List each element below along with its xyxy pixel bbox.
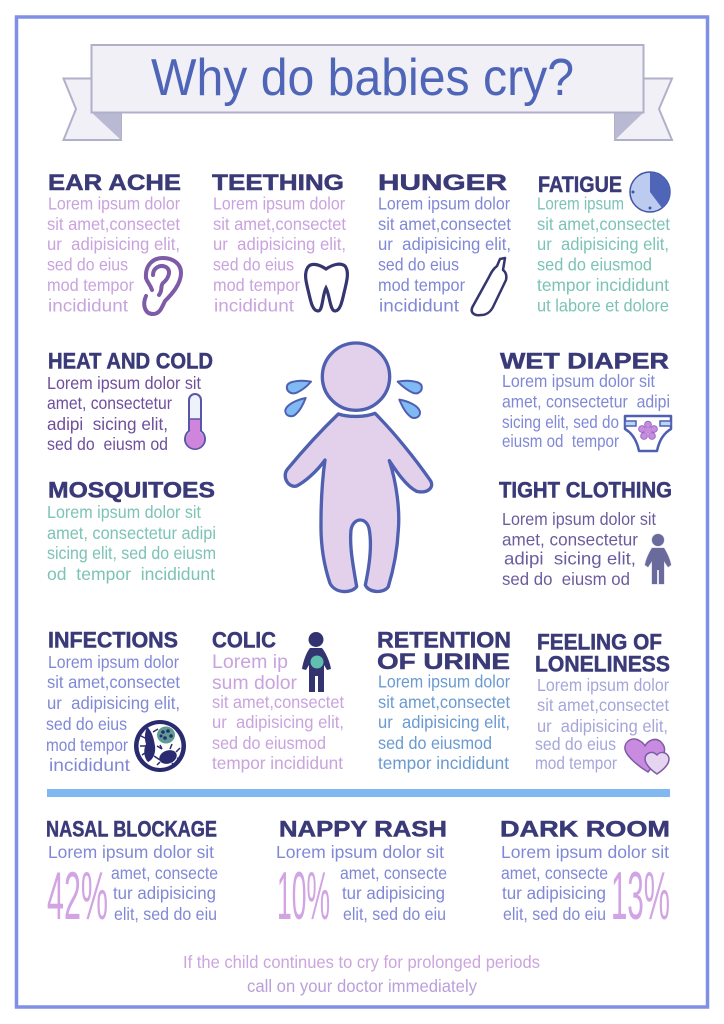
text block: ur adipisicing elit, [537,234,669,254]
text block: Lorem ipsum dolor [213,194,345,214]
tear: lower left [285,398,306,416]
text block: od tempor incididunt [47,564,215,584]
panel: hunger [378,170,511,316]
text block: elit, sed do eiu [343,904,446,924]
baby head [322,343,390,410]
text block: sed do eiusm od [47,434,168,454]
text block: ur adipisicing elit, [213,234,346,254]
text block: sed do eius [47,254,128,274]
banner left fold [91,112,121,140]
heading: RETENTION [377,628,511,652]
banner right tail [615,78,672,140]
text block: ur adipisicing elit, [378,712,510,732]
heading: NASAL BLOCKAGE [46,816,217,842]
footer note: If the child continues to cry for prolonged periods [183,952,540,972]
title banner [64,45,672,140]
text block: ur adipisicing elit, [537,716,668,736]
panel: fatigue [537,172,670,316]
text block: Lorem ipsum dolor sit [47,373,201,393]
icon: baby bottle [472,258,506,315]
text block: mod tempor [535,753,617,773]
text block: ur adipisicing elit, [47,234,180,254]
text block: amet, consectetur [47,393,172,413]
text block: Lorem ipsum dolor sit [502,371,655,391]
title: Why do babies cry? [151,49,574,107]
icon: clock [630,172,670,212]
baby body [285,413,432,592]
text block: adipi sicing elit, [47,414,168,434]
panel: infections [46,628,186,775]
heading: WET DIAPER [500,348,669,374]
text block: amet, consectetur [502,530,638,550]
divider bar [47,789,670,797]
text block: sit amet,consectet [47,214,180,234]
panel: ear ache [47,170,181,316]
text block: Lorem ipsum dolor [378,672,510,692]
text block: Lorem ipsum dolor [378,194,510,214]
text block: sed do eiusm od [502,569,630,589]
panel: nasal blockage: 42% [47,858,108,934]
text block: incididunt [49,755,130,775]
banner right fold [615,112,644,140]
text block: sit amet,consectet [378,692,510,712]
heading: MOSQUITOES [48,478,215,502]
text block: ur adipisicing elit, [378,234,511,254]
text block: Lorem ipsum dolor sit [48,842,214,862]
text block: sit amet,consectet [378,214,511,234]
icon: hearts [625,739,669,774]
text block: sed do eius [213,254,294,274]
text block [47,502,216,584]
text block: sit amet,consectet [537,695,669,715]
icon: ear [144,258,181,314]
panel: nappy rash: 10% [277,858,330,934]
text block: adipi sicing elit, [504,548,636,568]
text block: sed do eiusmod [212,733,326,753]
text block: sit amet,consectet [212,692,344,712]
text block: ur adipisicing elit, [212,712,344,732]
text block: amet, consectetur adipi [502,392,670,412]
text block: sed do eiusmod [537,254,652,274]
text block: tempor incididunt [378,753,509,773]
text block [47,194,180,316]
text block: mod tempor [46,735,128,755]
heading: HEAT AND COLD [48,348,213,374]
text block: tur adipisicing [502,883,606,903]
panel: heat and cold [47,348,213,454]
panel: nappy rash [276,816,447,934]
text block: sed do eiusmod [378,733,492,753]
text block: elit, sed do eiu [503,904,606,924]
panel: tight clothing [499,478,672,589]
text block [47,373,201,454]
icon: diaper [625,416,671,451]
text block: sed do eius [46,714,127,734]
footer note [183,952,540,996]
text block [535,675,669,773]
icon: germs [134,720,186,772]
text block: amet, consecte [340,863,447,883]
text block: Lorem ipsum [537,194,624,214]
text block [46,652,180,775]
banner left tail [64,78,121,140]
heading: OF URINE [377,649,510,674]
text block: sed do eius [535,734,616,754]
panel: dark room [500,816,670,934]
text block: eiusm od tempor [502,431,619,451]
crying baby figure [285,343,432,592]
text block: incididunt [214,296,294,316]
panel: feeling of loneliness [535,630,670,774]
text block [502,371,670,451]
text block: tur adipisicing [342,883,445,903]
text block: amet, consecte [111,863,218,883]
icon: child in tight clothes [645,534,671,584]
text block [502,509,656,589]
text block [537,194,670,316]
panel: retention of urine [377,628,511,773]
text block: sit amet,consectet [47,672,180,692]
heading: DARK ROOM [500,816,670,842]
heading: FEELING OF [537,630,662,654]
text block: Lorem ipsum dolor [48,194,180,214]
panel: teething [212,170,347,316]
text block: amet, consecte [501,863,608,883]
icon: thermometer [185,394,205,449]
text block: elit, sed do eiu [114,904,217,924]
text block: Lorem ipsum dolor [537,675,669,695]
text block [378,672,510,773]
panel: wet diaper [500,348,671,451]
text block: mod tempor [213,275,300,295]
footer note: call on your doctor immediately [247,976,477,996]
text block: mod tempor [47,275,134,295]
heading: EAR ACHE [48,170,181,195]
text block: sed do eius [378,254,459,274]
text block: ut labore et dolore [537,296,669,316]
text block: Lorem ipsum dolor sit [47,502,201,522]
text block: sum dolor [212,672,297,694]
text block: sicing elit, sed do [502,412,619,432]
text block: tempor incididunt [537,275,669,295]
banner main ribbon [92,45,644,112]
heading: LONELINESS [535,652,670,676]
panel: mosquitoes [47,478,216,584]
panel: nasal blockage [46,816,218,934]
text block [501,842,669,924]
text block: amet, consectetur adipi [47,523,216,543]
text block: incididunt [379,296,459,316]
icon: tooth [306,264,347,311]
heading: FATIGUE [538,172,622,197]
text block: tempor incididunt [212,753,343,773]
icon: child with belly ache [302,632,331,692]
text block: incididunt [48,296,128,316]
text block: mod tempor [378,275,465,295]
text block: Lorem ipsum dolor [48,652,179,672]
heading: TEETHING [212,170,344,195]
text block: Lorem ipsum dolor sit [502,509,656,529]
panel: colic [212,628,344,773]
text block [212,651,344,773]
text block: Lorem ipsum dolor sit [276,842,444,862]
text block: tur adipisicing [113,883,216,903]
tear: lower right [399,400,420,418]
tear: upper right [398,381,422,393]
text block: Lorem ip [212,651,288,673]
text block: sit amet,consectet [213,214,346,234]
heading: COLIC [212,628,276,652]
heading [535,630,670,676]
text block [378,194,511,316]
text block: Lorem ipsum dolor sit [501,842,669,862]
text block [48,842,218,924]
text block: sicing elit, sed do eiusm [47,543,216,563]
heading: TIGHT CLOTHING [499,478,672,502]
heading: NAPPY RASH [279,816,447,842]
heading [377,628,511,674]
text block [213,194,346,316]
text block: ur adipisicing elit, [47,693,180,713]
text block [276,842,447,924]
heading: INFECTIONS [48,628,178,652]
tear: upper left [287,381,311,393]
heading: HUNGER [378,170,507,195]
text block: sit amet,consectet [537,214,670,234]
